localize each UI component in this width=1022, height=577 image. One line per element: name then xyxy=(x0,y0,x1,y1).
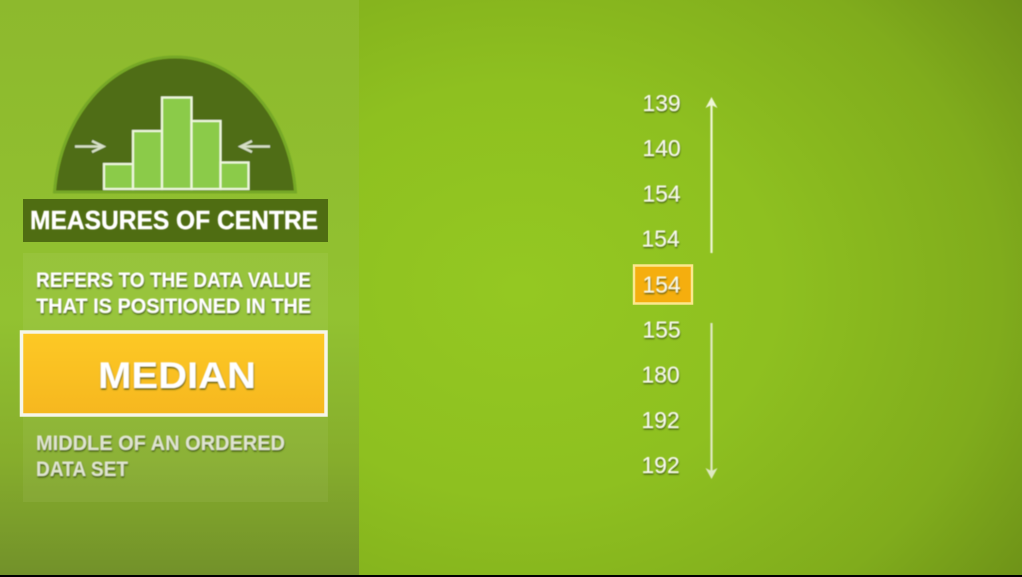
values below median position: upper half: 154 xyxy=(642,180,681,206)
text block: conclusion: DATA SET xyxy=(36,458,128,481)
values above median position: lower half xyxy=(641,316,681,478)
values above median position: lower half: 155 xyxy=(642,316,681,342)
text block: intro xyxy=(36,269,311,318)
values below median position: upper half: 154 xyxy=(641,226,680,252)
callout: median: MEDIAN xyxy=(98,355,256,396)
panel: left sidebar xyxy=(0,0,359,575)
arrow: up xyxy=(706,97,718,253)
values below median position: upper half: 139 xyxy=(642,90,681,116)
values below median position: upper half xyxy=(641,90,681,252)
histogram bars xyxy=(104,98,248,189)
text block: conclusion: MIDDLE OF AN ORDERED xyxy=(36,432,285,455)
values above median position: lower half: 180 xyxy=(641,362,680,388)
panel: definition text xyxy=(22,253,328,502)
callout: median xyxy=(22,332,326,415)
text block: conclusion xyxy=(36,432,285,481)
values above median position: lower half: 192 xyxy=(641,407,680,433)
icon: histogram dome xyxy=(54,57,296,192)
text block: intro: THAT IS POSITIONED IN THE xyxy=(36,295,311,318)
arrow: pointing left xyxy=(240,141,270,152)
highlighted median value xyxy=(634,266,692,304)
arrow: pointing right xyxy=(75,141,104,152)
title xyxy=(23,199,328,242)
arrow: down xyxy=(706,323,718,479)
title: MEASURES OF CENTRE xyxy=(30,205,318,235)
ordered data list xyxy=(634,90,692,478)
text block: intro: REFERS TO THE DATA VALUE xyxy=(36,269,311,292)
values above median position: lower half: 192 xyxy=(641,452,680,478)
values below median position: upper half: 140 xyxy=(642,135,681,161)
highlighted median value: 154 xyxy=(642,272,681,298)
